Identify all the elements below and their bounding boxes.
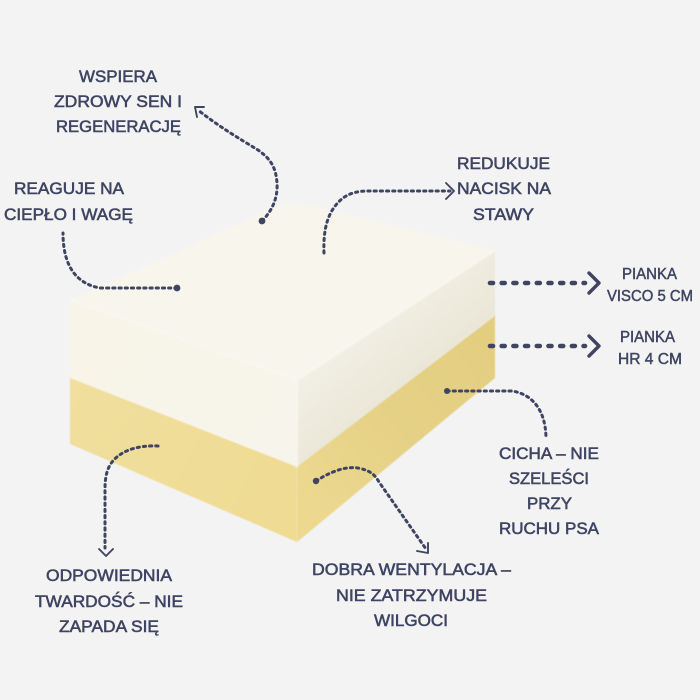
label: cicha nie szeleści przy ruchu psa: SZELEŚCI <box>509 469 589 488</box>
HR foam layer: right face <box>297 314 495 542</box>
label: redukuje nacisk na stawy: REDUKUJE <box>457 154 550 173</box>
arrow: cicha <box>444 388 546 439</box>
label: redukuje nacisk na stawy <box>457 154 552 224</box>
label: reaguje na ciepło i wagę <box>4 179 133 224</box>
arrow: pianka hr <box>490 336 599 356</box>
label: dobra wentylacja nie zatrzymuje wilgoci: WILGOCI <box>374 611 448 630</box>
label: pianka hr 4 cm: PIANKA <box>620 329 676 346</box>
label: wspiera zdrowy sen i regenerację: WSPIERA <box>79 67 158 86</box>
label: redukuje nacisk na stawy: STAWY <box>473 205 534 224</box>
label: reaguje na ciepło i wagę: CIEPŁO I WAGĘ <box>4 205 133 224</box>
label: reaguje na ciepło i wagę: REAGUJE NA <box>14 179 125 198</box>
label: wspiera zdrowy sen i regenerację: REGENERACJĘ <box>56 117 181 136</box>
arrow: reaguje <box>63 233 180 291</box>
visco foam layer: top face <box>70 203 495 380</box>
label: dobra wentylacja nie zatrzymuje wilgoci: DOBRA WENTYLACJA – <box>312 560 512 579</box>
label: pianka hr 4 cm: HR 4 CM <box>618 351 682 368</box>
label: cicha nie szeleści przy ruchu psa: CICHA – NIE <box>499 444 599 463</box>
label: odpowiednia twardość nie zapada się: ODPOWIEDNIA <box>46 566 173 585</box>
label: odpowiednia twardość nie zapada się: TWARDOŚĆ – NIE <box>35 592 183 611</box>
arrow: pianka visco <box>490 273 599 293</box>
label: odpowiednia twardość nie zapada się: ZAPADA SIĘ <box>59 617 159 636</box>
label: cicha nie szeleści przy ruchu psa <box>499 444 600 538</box>
label: redukuje nacisk na stawy: NACISK NA <box>457 179 552 198</box>
mattress block <box>70 203 495 542</box>
label: wspiera zdrowy sen i regenerację: ZDROWY SEN I <box>54 92 182 111</box>
label: cicha nie szeleści przy ruchu psa: RUCHU PSA <box>499 519 600 538</box>
arrow: odpowiednia <box>99 446 158 556</box>
arrow: redukuje <box>324 183 454 253</box>
arrow: dobra wentylacja <box>313 468 428 553</box>
arrow: wspiera <box>195 107 277 224</box>
label: pianka visco 5 cm <box>607 266 693 305</box>
label: cicha nie szeleści przy ruchu psa: PRZY <box>527 494 572 513</box>
label: odpowiednia twardość nie zapada się <box>35 566 183 636</box>
soft highlight along foam edges <box>70 250 495 467</box>
label: pianka visco 5 cm: PIANKA <box>622 266 678 283</box>
HR foam layer: left face <box>70 376 297 542</box>
label: wspiera zdrowy sen i regenerację <box>54 67 182 136</box>
label: pianka hr 4 cm <box>618 329 682 368</box>
label: pianka visco 5 cm: VISCO 5 CM <box>607 288 693 305</box>
label: dobra wentylacja nie zatrzymuje wilgoci: NIE ZATRZYMUJE <box>336 586 487 605</box>
visco foam layer: right face <box>297 250 495 467</box>
visco foam layer: left face <box>70 300 297 467</box>
label: dobra wentylacja nie zatrzymuje wilgoci <box>312 560 512 630</box>
